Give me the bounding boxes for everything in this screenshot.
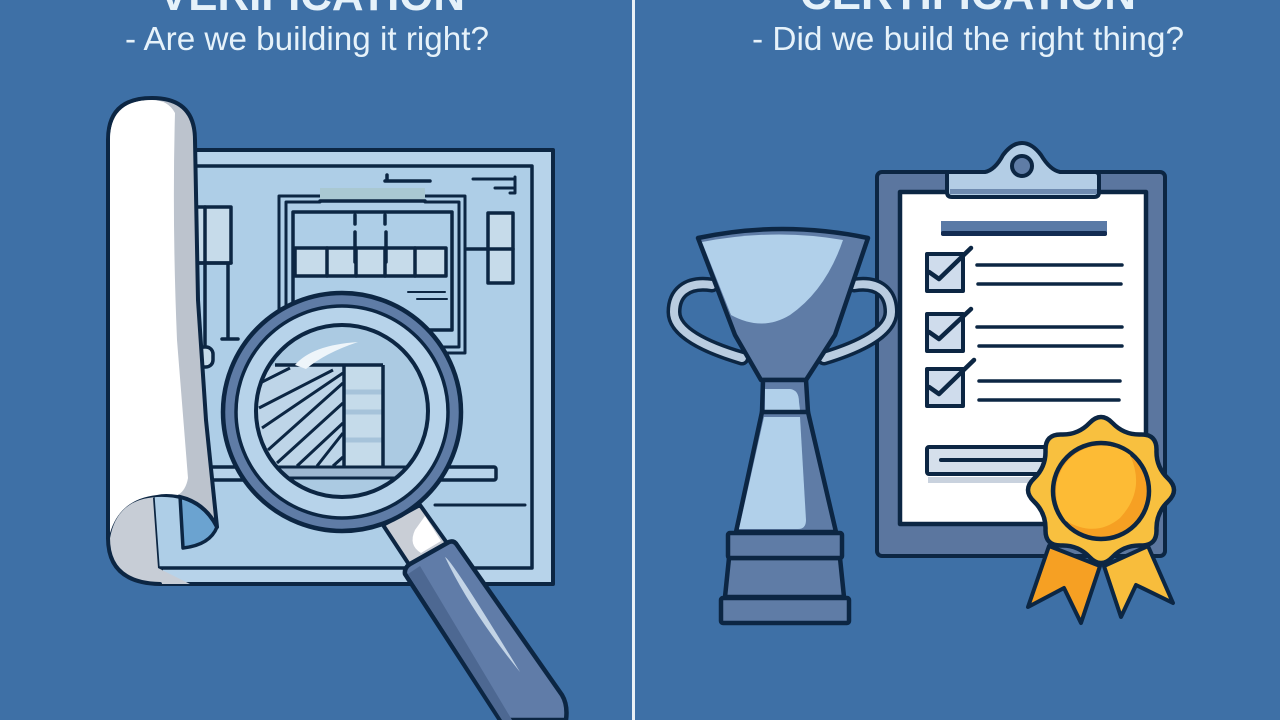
clipboard clip xyxy=(947,143,1099,197)
illustration: blueprint sheet xyxy=(153,150,553,584)
trophy stem xyxy=(736,380,836,532)
magnifier ring xyxy=(223,293,461,531)
blueprint lower band xyxy=(208,467,496,480)
blueprint central frame xyxy=(279,175,515,353)
magnifier neck xyxy=(383,505,447,569)
magnifier handle xyxy=(405,541,566,720)
signature bar xyxy=(927,447,1057,483)
left ribbon xyxy=(1028,546,1100,623)
checklist row 2 xyxy=(927,309,1122,351)
right ribbon xyxy=(1104,546,1173,617)
trophy handles xyxy=(674,284,891,358)
trophy base xyxy=(721,533,849,623)
illustration: clipboard xyxy=(877,143,1165,556)
blueprint left component xyxy=(190,207,238,367)
illustration: trophy xyxy=(674,229,891,623)
panel: verification xyxy=(108,0,566,720)
illustration: scroll curl xyxy=(108,98,217,584)
checklist row 1 xyxy=(927,248,1122,291)
badge medallion xyxy=(1053,443,1149,539)
magnifier lens xyxy=(258,327,426,495)
subheading: did we build the right thing: - Did we build the right thing? xyxy=(752,20,1184,57)
badge rosette xyxy=(1028,417,1174,563)
subheading: are we building it right: - Are we building it right? xyxy=(125,20,489,57)
checklist row 3 xyxy=(927,360,1120,406)
panel: certification xyxy=(674,0,1184,623)
illustration: award badge xyxy=(1028,417,1174,623)
clipboard header bar xyxy=(941,221,1107,236)
illustration: magnifying glass xyxy=(223,293,566,720)
blueprint right component xyxy=(467,213,513,283)
trophy cup xyxy=(698,229,868,380)
